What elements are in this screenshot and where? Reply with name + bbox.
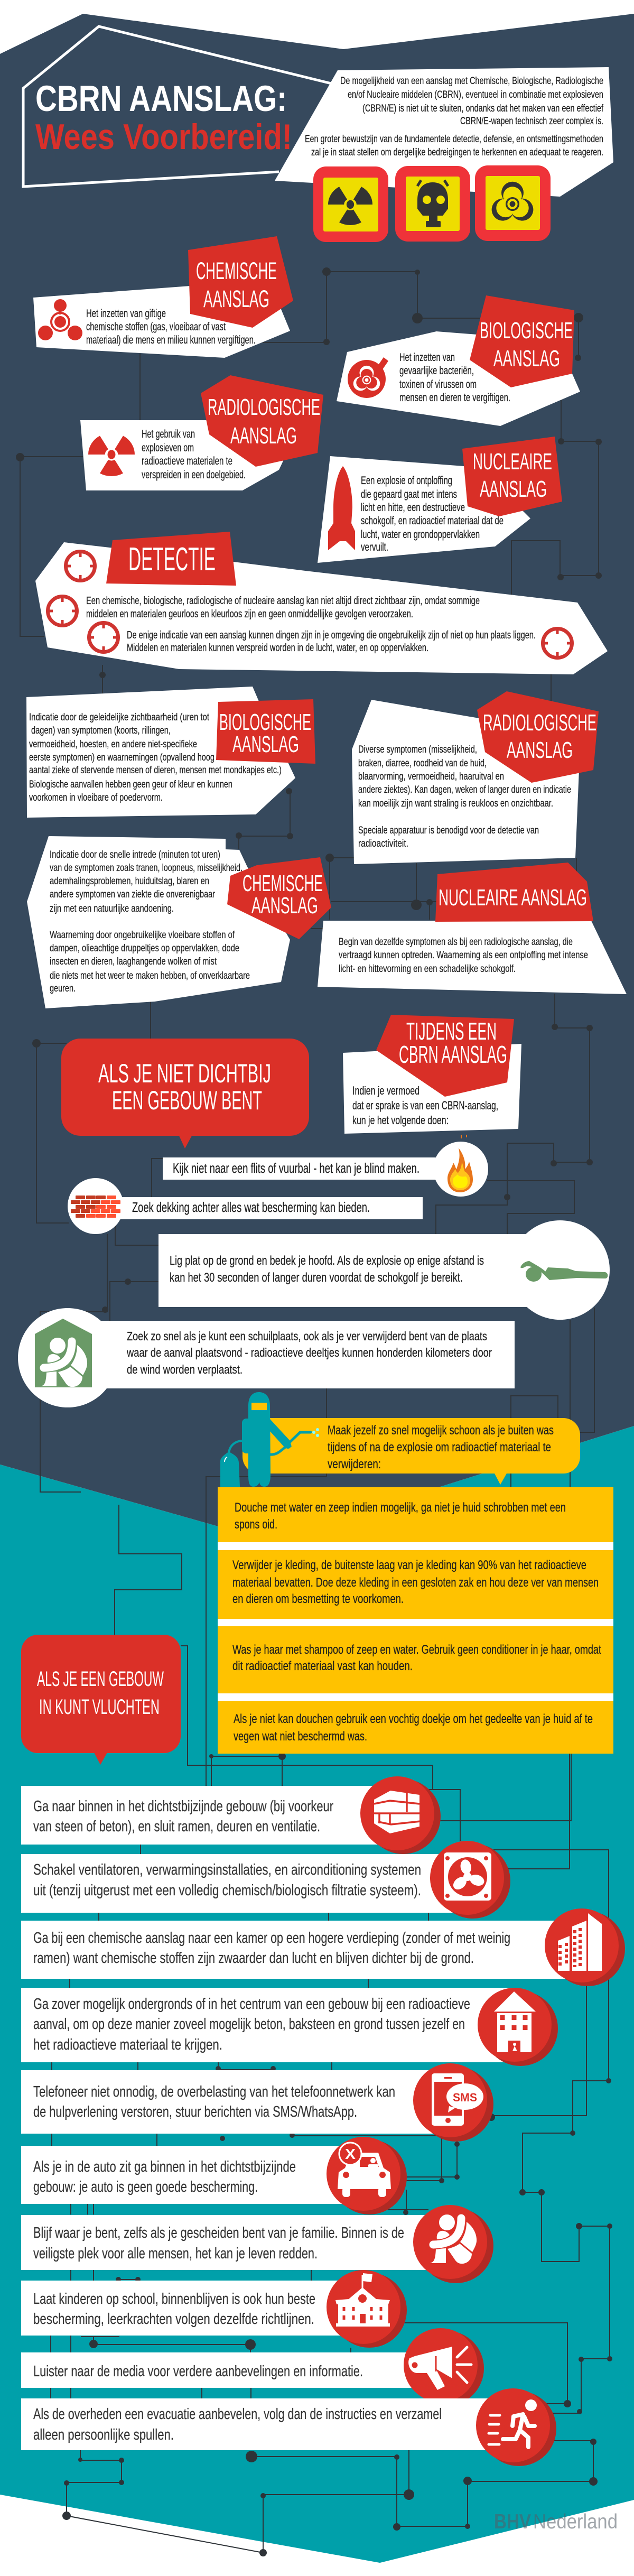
heading tag [216, 699, 315, 764]
callout: als je een gebouw in kunt vluchten: ALS JE EEN GEBOUW [37, 1667, 164, 1691]
icon: biohazard bomb [348, 357, 388, 398]
heading tag: CHEMISCHE [243, 870, 323, 896]
step: kinderen op school [21, 2270, 407, 2348]
panel: biologische aanslag: Het inzetten van [399, 351, 455, 364]
panel: nucleaire aanslag: die gepaard gaat met intens [361, 488, 457, 501]
heading tag: TIJDENS EEN [406, 1017, 497, 1045]
panel: detectie chemische aanslag: andere symptomen van ziekte die onverenigbaar [50, 888, 215, 900]
icon: brick wall [71, 1196, 120, 1218]
heading tag [106, 532, 236, 586]
teal lower background [0, 1426, 634, 2563]
panel: detectie: Middelen en materialen kunnen verspreid worden in de lucht, water, en op oppervlakken. [127, 642, 428, 654]
icon: gas mask warning sign [395, 166, 470, 242]
step: kinderen op school: bescherming, leerkrachten volgen dezelfde richtlijnen. [33, 2311, 314, 2328]
step: evacuatie [21, 2388, 556, 2466]
panel: detectie biologische aanslag: dagen) van symptomen (koorts, rillingen, [31, 725, 171, 736]
step: media volgen [21, 2328, 484, 2406]
icon: car with cross [338, 2143, 391, 2197]
panel: ontsmettingsstappen: vegen wat niet beschermd was. [234, 1729, 367, 1744]
icon: crosshair top [66, 552, 95, 580]
heading tag: NUCLEAIRE [473, 449, 552, 475]
panel: detectie: middelen en materialen geurloos en kleurloos zijn en geen onmiddellijke gevolgen veroorzaken. [86, 608, 413, 620]
panel: detectie chemische aanslag: die niets met het weer te maken hebben, of onverklaarbare [50, 970, 250, 981]
callout: als je niet dichtbij een gebouw bent [61, 1039, 309, 1148]
step: niet onnodig telefoneren [21, 2063, 493, 2142]
icon: school [335, 2273, 390, 2327]
callout: als je niet dichtbij een gebouw bent: ALS JE NIET DICHTBIJ [98, 1059, 271, 1088]
heading tag: AANSLAG [507, 737, 573, 763]
step: plat op de grond: kan het 30 seconden of langer duren voordat de schokgolf je bereikt. [170, 1271, 463, 1285]
panel: nucleaire aanslag: vervuilt. [361, 541, 388, 553]
heading tag [227, 857, 331, 939]
icon: running person [489, 2399, 537, 2447]
panel: detectie radiologische aanslag: blaarvorming, vermoeidheid, haaruitval en [358, 771, 504, 782]
heading tag: DETECTIE [128, 541, 216, 578]
step: douche [218, 1487, 613, 1542]
callout: als je niet dichtbij een gebouw bent: EEN GEBOUW BENT [112, 1086, 262, 1115]
icon: fan [444, 1852, 491, 1901]
panel: tijdens een CBRN aanslag: dat er sprake is van een CBRN-aanslag, [352, 1099, 498, 1112]
heading tag: CBRN AANSLAG [399, 1041, 507, 1068]
icon: bricks [372, 1791, 421, 1833]
panel: radiologische aanslag: radioactieve materialen te [142, 455, 232, 467]
panel: detectie radiologische aanslag [352, 691, 599, 864]
icon: crouching person [430, 2214, 477, 2264]
title line 1: CBRN AANSLAG: [35, 78, 287, 119]
panel: radiologische aanslag: Het gebruik van [142, 428, 195, 440]
heading tag: AANSLAG [230, 423, 297, 449]
logo: BHV Nederland [494, 2510, 618, 2533]
heading tag [188, 236, 293, 328]
panel: radiologische aanslag [80, 375, 323, 490]
step: media volgen: Luister naar de media voor verdere aanbevelingen en informatie. [33, 2363, 363, 2380]
callout: jezelf schoonmaken: verwijderen: [328, 1457, 381, 1471]
heading tag [376, 1015, 514, 1097]
panel: detectie chemische aanslag: Indicatie door de snelle intrede (minuten tot uren) [50, 849, 220, 860]
panel: biologische aanslag: gevaarlijke bacteriën, [399, 365, 474, 377]
heading tag [470, 295, 574, 387]
panel: nucleaire aanslag: schokgolf, en radioactief materiaal dat de [361, 515, 504, 527]
callout: als je een gebouw in kunt vluchten: IN KUNT VLUCHTEN [39, 1695, 160, 1719]
heading tag [477, 691, 599, 783]
panel: introduction [275, 67, 613, 197]
step: naar binnen gaan: Ga naar binnen in het dichtstbijzijnde gebouw (bij voorkeur [33, 1798, 333, 1815]
step: ondergronds: het radioactieve materiaal te krijgen. [33, 2036, 222, 2053]
step: plat op de grond [158, 1220, 610, 1320]
icon: radiation warning sign [313, 166, 388, 242]
heading tag: AANSLAG [480, 476, 547, 502]
icon: crosshair left [48, 596, 77, 626]
panel: ontsmettingsstappen: dit radioactief materiaal vast kan houden. [232, 1659, 413, 1673]
step: ventilatie uitschakelen: Schakel ventilatoren, verwarmingsinstallaties, en airconditioning systemen [33, 1861, 421, 1878]
title block [23, 26, 331, 187]
panel: detectie chemische aanslag: geuren. [50, 983, 76, 994]
panel: tijdens een CBRN aanslag [343, 1015, 521, 1134]
step: ondergronds: aanval, om op deze manier zoveel mogelijk beton, baksteen en grond tussen jezelf en [33, 2016, 465, 2033]
panel: chemische aanslag: materiaal) die mens en milieu kunnen vergiftigen. [86, 334, 256, 346]
heading tag: BIOLOGISCHE [219, 709, 311, 735]
panel: detectie biologische aanslag: vermoeidheid, hoesten, en andere niet-specifieke [29, 738, 197, 750]
step: ventilatie uitschakelen [21, 1841, 510, 1919]
heading tag [462, 437, 562, 516]
step: ondergronds: Ga zover mogelijk ondergronds of in het centrum van een gebouw bij een radioactieve [33, 1996, 470, 2013]
step: schuilplaats zoeken: waar de aanval plaatsvond - radioactieve deeltjes kunnen honderden kilometers door [126, 1346, 492, 1359]
step: evacuatie: alleen persoonlijke spullen. [33, 2426, 174, 2443]
panel: ontsmettingsstappen: en dieren om besmetting te voorkomen. [232, 1592, 404, 1606]
icon: office towers [558, 1913, 602, 1971]
heading tag: AANSLAG [251, 893, 318, 919]
step: haar [218, 1626, 613, 1693]
step: plat op de grond: Lig plat op de grond en bedek je hoofd. Als de explosie op enige afstand is [170, 1254, 484, 1268]
panel: biologische aanslag [337, 295, 580, 426]
panel: detectie nucleaire aanslag [318, 863, 627, 994]
callout: jezelf schoonmaken: tijdens of na de explosie om radioactief materiaal te [328, 1440, 551, 1454]
step: blijf waar je bent: Blijf waar je bent, zelfs als je gescheiden bent van je familie. Binnen is de [33, 2225, 404, 2241]
step: flits of vuurbal [163, 1135, 488, 1197]
step: ondergronds [21, 1988, 558, 2066]
panel: detectie: Een chemische, biologische, radiologische of nucleaire aanslag kan niet altijd direct zichtbaar zijn, omdat sommige [86, 595, 480, 607]
panel: tijdens een CBRN aanslag: kun je het volgende doen: [352, 1114, 449, 1127]
icon: radiation [88, 435, 135, 476]
step: auto verlaten: gebouw: je auto is geen goede bescherming. [33, 2179, 258, 2195]
heading tag: AANSLAG [493, 346, 560, 372]
step: flits of vuurbal: Kijk niet naar een flits of vuurbal - het kan je blind maken. [173, 1160, 419, 1176]
step: ventilatie uitschakelen: uit (tenzij uitgerust met een volledig chemisch/biologisch filtratie systeem). [33, 1882, 421, 1899]
step: naar binnen gaan: van steen of beton), en sluit ramen, deuren en ventilatie. [33, 1818, 320, 1835]
step: kleding [218, 1550, 613, 1619]
callout: jezelf schoonmaken: Maak jezelf zo snel mogelijk schoon als je buiten was [328, 1423, 554, 1438]
panel: radiologische aanslag: explosieven om [142, 442, 194, 454]
panel: detectie biologische aanslag: voorkomen in vloeibare of poedervorm. [29, 792, 163, 803]
panel: biologische aanslag: toxinen of virussen om [399, 378, 477, 391]
panel: detectie chemische aanslag: dampen, olieachtige druppeltjes op oppervlakken, dode [50, 942, 239, 954]
panel: chemische aanslag: chemische stoffen (gas, vloeibaar of vast [86, 321, 226, 333]
panel: chemische aanslag [33, 236, 293, 358]
step: hogere verdieping [21, 1908, 625, 1986]
step: schuilplaats zoeken: Zoek zo snel als je kunt een schuilplaats, ook als je ver verwijderd bent van de plaats [127, 1329, 487, 1343]
panel: detectie biologische aanslag: Indicatie door de geleidelijke zichtbaarheid (uren tot [29, 711, 209, 723]
panel: ontsmettingsstappen [218, 1487, 613, 1754]
step: niet onnodig telefoneren: de hulpverlening verstoren, stuur berichten via SMS/WhatsApp. [33, 2104, 357, 2120]
callout: jezelf schoonmaken [243, 1418, 580, 1485]
heading tag [435, 863, 593, 922]
panel: nucleaire aanslag: Een explosie of ontploffing [361, 475, 452, 487]
icon: crosshair middle [89, 623, 118, 652]
step: schuilplaats zoeken: de wind worden verplaatst. [127, 1363, 243, 1376]
panel: radiologische aanslag: verspreiden in een doelgebied. [142, 469, 246, 481]
panel: detectie chemische aanslag [27, 836, 331, 1008]
panel: detectie chemische aanslag: insecten en dieren, laaghangende wolken of mist [50, 956, 217, 967]
panel: detectie chemische aanslag: ademhalingsproblemen, huiduitslag, blaren en [50, 875, 209, 887]
step: dekking zoeken: Zoek dekking achter alles wat bescherming kan bieden. [132, 1199, 370, 1215]
panel: detectie biologische aanslag [26, 687, 315, 818]
panel: nucleaire aanslag [318, 437, 562, 563]
panel: detectie chemische aanslag: van de symptomen zoals tranen, loopneus, misselijkheid, [50, 862, 243, 874]
icon: car with cross: X [345, 2146, 356, 2162]
icon: hazmat figure with hose [220, 1392, 319, 1487]
icon: chemical symbol [38, 299, 82, 340]
panel: detectie radiologische aanslag: braken, diarree, roodheid van de huid, [358, 757, 487, 769]
panel: tijdens een CBRN aanslag: Indien je vermoed [352, 1084, 419, 1097]
panel: detectie radiologische aanslag: Diverse symptomen (misselijkheid, [358, 744, 477, 755]
icon: phone with sms: SMS [453, 2091, 477, 2104]
step: evacuatie: Als de overheden een evacuatie aanbevelen, volg dan de instructies en verzamel [33, 2406, 442, 2423]
heading tag: RADIOLOGISCHE [208, 394, 320, 420]
panel: detectie radiologische aanslag: Speciale apparatuur is benodigd voor de detectie van [358, 824, 539, 836]
step: blijf waar je bent: veiligste plek voor alle mensen, het kan je leven redden. [33, 2245, 318, 2262]
icon: megaphone [408, 2347, 471, 2390]
icon: biohazard warning sign [475, 165, 551, 241]
panel: biologische aanslag: mensen en dieren te vergiftigen. [399, 392, 510, 404]
step: niet onnodig telefoneren: Telefoneer niet onnodig, de overbelasting van het telefoonnetwerk kan [33, 2083, 395, 2100]
title line 2: Wees Voorbereid! [35, 117, 292, 157]
panel: detectie biologische aanslag: eerste symptomen) en waarnemingen (opvallend hoog [29, 752, 215, 763]
step: dekking zoeken [68, 1178, 423, 1234]
step: naar binnen gaan [21, 1776, 441, 1854]
panel: detectie [35, 532, 608, 674]
logo: BHV Nederland: Nederland [533, 2510, 618, 2533]
panel: detectie radiologische aanslag: kan moeilijk zijn want straling is reukloos en onzichtbaar. [358, 798, 553, 809]
icon: person sheltering in house [35, 1319, 92, 1387]
callout: als je een gebouw in kunt vluchten [21, 1635, 181, 1765]
panel: detectie chemische aanslag: zijn met een natuurlijke aandoening. [50, 903, 174, 914]
icon: lying person [520, 1261, 608, 1282]
panel: ontsmettingsstappen: spons oid. [235, 1517, 277, 1532]
step: hogere verdieping: ramen) want chemische stoffen zijn zwaarder dan lucht en blijven dichter bij de grond. [33, 1950, 474, 1967]
icon: crosshair right [543, 629, 572, 657]
panel: detectie radiologische aanslag: radioactiviteit. [358, 838, 408, 849]
step: schuilplaats zoeken [18, 1308, 515, 1407]
heading tag: AANSLAG [232, 731, 299, 757]
icon: rocket [328, 466, 355, 550]
heading tag [201, 375, 323, 467]
icon: phone with sms [432, 2073, 483, 2126]
panel: detectie biologische aanslag: aantal zieke of stervende mensen of dieren, mensen met mondkapjes etc.) [29, 764, 282, 776]
panel: nucleaire aanslag: licht en hitte, een destructieve [361, 502, 465, 514]
panel: nucleaire aanslag: lucht, water en grondoppervlakken [361, 529, 480, 541]
icon: building with shelter [494, 1991, 536, 2052]
panel: detectie nucleaire aanslag: licht- en hittevorming en een schadelijke schokgolf. [339, 963, 516, 975]
step: auto verlaten [21, 2137, 407, 2214]
panel: detectie biologische aanslag: Biologische aanvallen hebben geen geur of kleur en kunnen [29, 779, 232, 790]
panel: detectie chemische aanslag: Waarneming door ongebruikelijke vloeibare stoffen of [50, 929, 235, 941]
step: kinderen op school: Laat kinderen op school, binnenblijven is ook hun beste [33, 2291, 315, 2308]
icon: flame [447, 1135, 473, 1192]
logo: BHV Nederland: BHV [494, 2510, 531, 2533]
heading tag: AANSLAG [203, 285, 269, 312]
step: blijf waar je bent [21, 2205, 493, 2283]
heading tag: CHEMISCHE [196, 257, 277, 284]
step: doekje [218, 1701, 613, 1754]
dark upper background [0, 14, 634, 1541]
panel: chemische aanslag: Het inzetten van giftige [86, 308, 166, 320]
step: auto verlaten: Als je in de auto zit ga binnen in het dichtstbijzijnde [33, 2158, 296, 2175]
